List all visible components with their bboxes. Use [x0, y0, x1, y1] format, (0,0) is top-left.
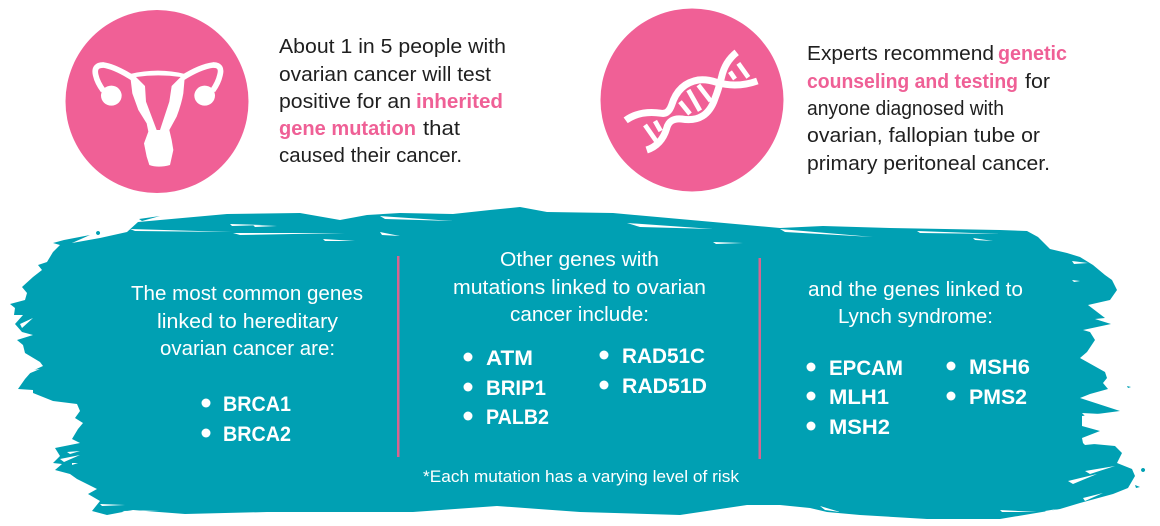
text: genetic counseling recommendation: Experts recommend: [807, 43, 994, 65]
panel: uterus fact: [66, 10, 506, 193]
text: genetic counseling recommendation: genetic: [998, 43, 1067, 65]
text block: other genes: cancer include:: [510, 304, 649, 326]
text block: other genes: RAD51C: [622, 345, 705, 368]
text: one in five fact: positive for an: [279, 91, 411, 113]
text block: other genes: RAD51D: [622, 375, 707, 398]
text: one in five fact: that: [423, 118, 460, 140]
text: genetic counseling recommendation: primary peritoneal cancer.: [807, 153, 1050, 175]
text: genetic counseling recommendation: ovarian, fallopian tube or: [807, 125, 1040, 147]
text block: Lynch syndrome genes: and the genes linked to: [808, 279, 1023, 301]
text: one in five fact: ovarian cancer will test: [279, 64, 491, 86]
footnote: *Each mutation has a varying level of risk: [423, 467, 740, 486]
text block: other genes: ATM: [486, 347, 533, 370]
divider: left: [397, 256, 400, 457]
text: genetic counseling recommendation: counseling and testing: [807, 71, 1018, 93]
text block: Lynch syndrome genes: Lynch syndrome:: [838, 306, 993, 328]
text block: Lynch syndrome genes: MLH1: [829, 386, 889, 409]
text: one in five fact: gene mutation: [279, 118, 416, 140]
text block: Lynch syndrome genes: MSH2: [829, 416, 890, 439]
text block: most common genes: ovarian cancer are:: [160, 338, 335, 360]
text block: other genes: [453, 249, 707, 429]
text block: Lynch syndrome genes: [806, 279, 1030, 439]
text block: other genes: BRIP1: [486, 377, 546, 400]
text block: most common genes: [131, 283, 363, 446]
icon: uterus in pink circle: [66, 10, 248, 193]
text: genetic counseling recommendation: anyone diagnosed with: [807, 98, 1004, 120]
icon: DNA helix in pink circle: [600, 8, 784, 192]
text block: Lynch syndrome genes: EPCAM: [829, 357, 903, 380]
divider: right: [758, 258, 761, 459]
panel: teal brush stroke background: [10, 207, 1145, 519]
text: genetic counseling recommendation: for: [1025, 71, 1050, 93]
text block: most common genes: BRCA2: [223, 423, 291, 446]
text: one in five fact: inherited: [416, 91, 503, 113]
text: one in five fact: caused their cancer.: [279, 145, 462, 167]
text block: most common genes: The most common genes: [131, 283, 363, 305]
panel: testing recommendation: [600, 8, 1067, 192]
text block: most common genes: BRCA1: [223, 393, 291, 416]
text block: Lynch syndrome genes: MSH6: [969, 356, 1030, 379]
text block: most common genes: linked to hereditary: [157, 311, 338, 333]
text: genetic counseling recommendation: [807, 43, 1067, 175]
text block: Lynch syndrome genes: PMS2: [969, 386, 1027, 409]
text: one in five fact: About 1 in 5 people with: [279, 36, 506, 58]
text block: other genes: PALB2: [486, 406, 549, 429]
text block: other genes: Other genes with: [500, 249, 659, 271]
text: one in five fact: [279, 36, 506, 167]
text block: other genes: mutations linked to ovarian: [453, 277, 706, 299]
